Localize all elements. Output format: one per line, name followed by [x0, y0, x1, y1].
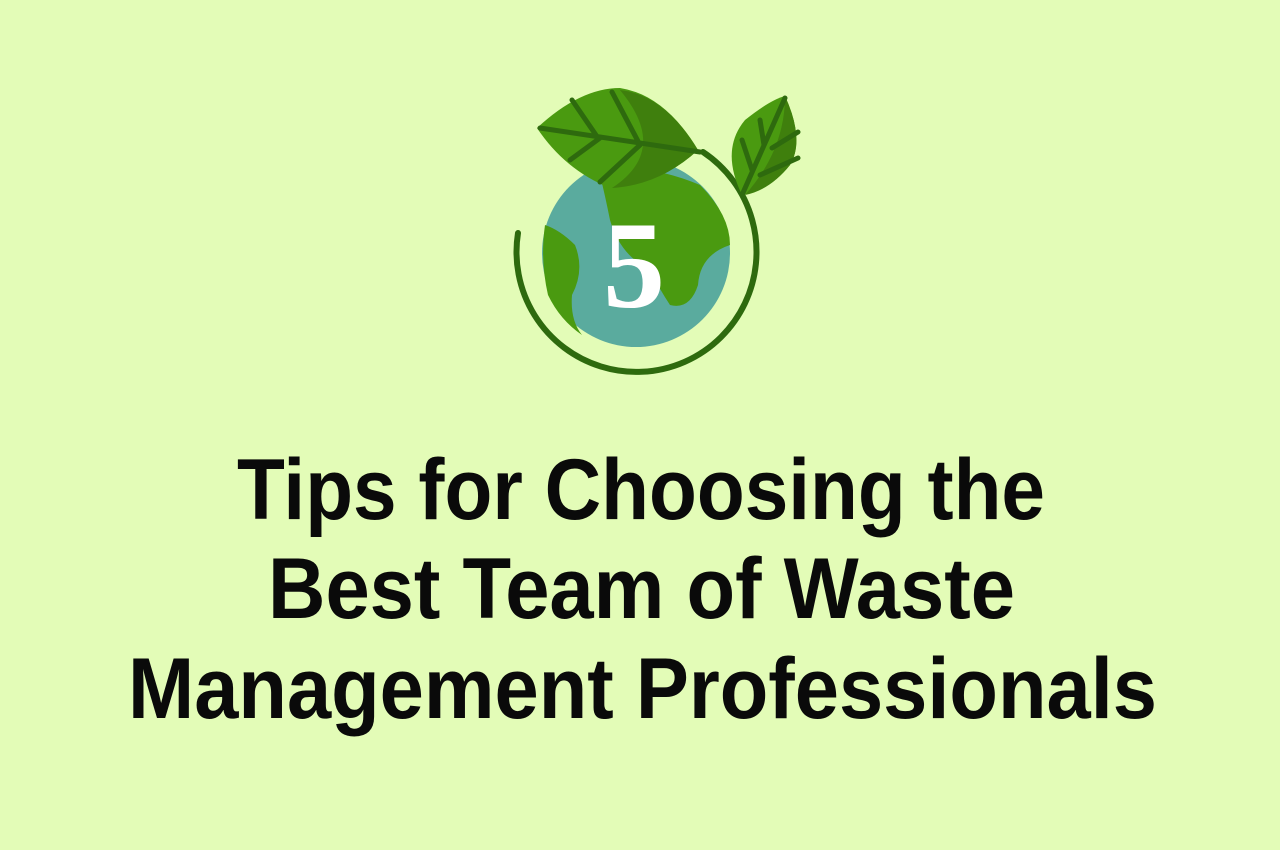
number 5: 5	[603, 197, 665, 334]
title: Tips for Choosing the	[237, 442, 1045, 538]
globe	[542, 159, 730, 347]
title: Best Team of Waste	[268, 541, 1015, 637]
title	[128, 442, 1157, 737]
ring arc	[517, 152, 757, 372]
icon: globe with leaves	[517, 88, 798, 372]
leaf: large	[537, 88, 700, 188]
leaf: small	[732, 96, 798, 195]
title: Management Professionals	[128, 641, 1157, 737]
